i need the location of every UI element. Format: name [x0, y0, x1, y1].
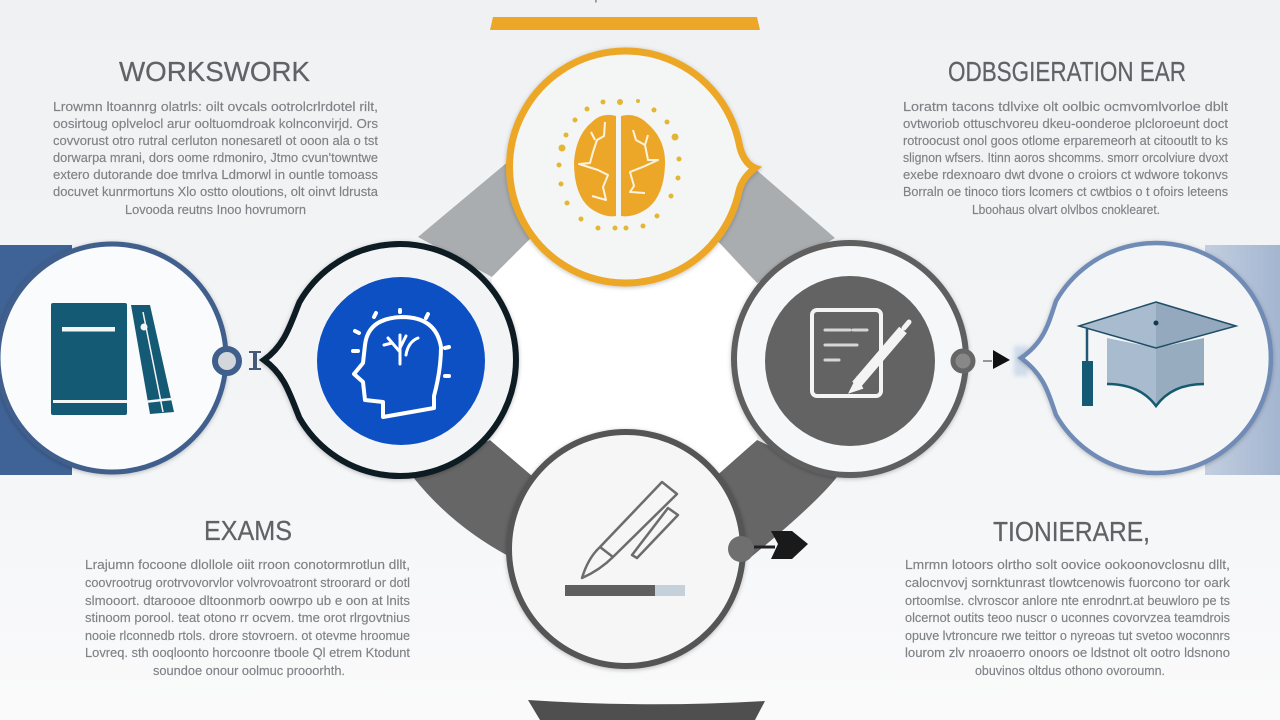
- body text: opuve lvtroncure rwe teittor o nyreoas tut svetoo woconnrs: [905, 629, 1230, 643]
- body text: ortoomlse. clvroscor anlore nte enrodnrt.at beuwloro pe ts: [905, 594, 1230, 608]
- icon: brain: [556, 99, 682, 230]
- body text: olcernot outits teoo nuscr o uconnes covorvzea teamdrois: [905, 611, 1230, 625]
- progress bar: [565, 585, 685, 596]
- body text: Borraln oe tinoco tiors lcomers ct cwtbios o t ofoirs leteens: [903, 185, 1228, 199]
- body text: exebe rdexnoaro dwt dvone o croiors ct wdwore tokonvs: [903, 168, 1228, 182]
- body text: Lrajumn focoone dlollole oiit rroon conotormrotlun dllt,: [85, 558, 410, 572]
- body text: Lmrmn lotoors olrtho solt oovice ookoonovclosnu dllt,: [905, 558, 1230, 572]
- icon: graduation cap: [1079, 302, 1236, 408]
- icon: head with idea: [353, 310, 449, 417]
- panel: observation: [903, 56, 1229, 217]
- body text: [903, 100, 1229, 217]
- body text: docuvet kunrmortuns Xlo ostto oloutions, olt oinvt ldrusta: [53, 185, 378, 199]
- left side band: [0, 245, 72, 475]
- soft glow at graduation pointer: [1014, 346, 1028, 376]
- connector arrow: document: [953, 350, 1010, 371]
- panel: final: [905, 516, 1231, 678]
- panel: exams: [85, 515, 411, 678]
- heading: TIONIERARE,: [993, 516, 1150, 547]
- body text: soundoe onour oolmuc prooorhth.: [153, 664, 345, 678]
- body text: Lboohaus olvart olvlbos cnoklearet.: [972, 203, 1160, 217]
- icon: books: [51, 303, 174, 415]
- head bubble: [264, 244, 516, 476]
- heading: ODBSGIERATION EAR: [948, 56, 1186, 87]
- body text: stinoom porool. teat otono rr ocvem. tme orot rlrgovtnius: [85, 611, 410, 625]
- document bubble: [734, 243, 966, 475]
- book bubble: [0, 244, 226, 472]
- body text: nooie rlconnedb rtols. drore stovroern. ot otevme hroomue: [85, 629, 410, 643]
- heading: EXAMS: [204, 515, 292, 546]
- graduation bubble: [1021, 243, 1271, 473]
- top accent bar: [490, 17, 760, 30]
- brain bubble: [510, 51, 755, 283]
- body text: obuvinos oltdus othono ovoroumn.: [975, 664, 1165, 678]
- panel: workswork: [53, 56, 379, 217]
- body text: rotroocust onol goos otlome erparemeorh at citooutlt to ks: [903, 134, 1228, 148]
- body text: oosirtoug oplvelocl arur ooltuomdroak kolnconvirjd. Ors: [53, 117, 378, 131]
- icon: pen and line: [582, 482, 678, 578]
- connector node: books: [215, 349, 261, 373]
- heading: WORKSWORK: [119, 56, 310, 87]
- right side band: [1205, 245, 1280, 475]
- body text: Lovreq. sth ooqloonto horcoonre tboole Ql etrem Ktodunt: [85, 646, 411, 660]
- body text: Loratm tacons tdlvixe olt oolbic ocmvomlvorloe dblt: [903, 100, 1229, 114]
- body text: extero dutorande doe tmrlva Ldmorwl in ountle tomoass: [53, 168, 378, 182]
- body text: dorwarpa mrani, dors oome rdmoniro, Jtmo cvun'towntwe: [53, 151, 378, 165]
- connector arrow: pen: [728, 531, 808, 562]
- body text: ovtworiob ottuschvoreu dkeu-oonderoe plcloroeunt doct: [903, 117, 1229, 131]
- body text: Lrowmn ltoannrg olatrls: oilt ovcals ootrolcrlrdotel rilt,: [53, 100, 378, 114]
- body text: lourom zlv nroaoerro onoors oe ldstnot olt ootro ldsnono: [905, 646, 1230, 660]
- bottom accent bar: [528, 700, 765, 720]
- pen bubble: [509, 432, 743, 666]
- body text: Lovooda reutns Inoo hovrumorn: [125, 203, 306, 217]
- body text: calocnvovj sornktunrast tlowtcenowis fuorcono tor oark: [905, 576, 1231, 590]
- body text: slmooort. dtaroooe dltoonmorb oowrpo ub e oon at lnits: [85, 594, 410, 608]
- central ring: [413, 143, 837, 562]
- body text: covvorust otro rutral cerluton nonesaretl ot ooon ala o tst: [53, 134, 379, 148]
- icon: document and pen: [812, 310, 909, 396]
- body text: coovrootrug orotrvovorvlor volvrovoatront stroorard or dotl: [85, 576, 410, 590]
- body text: [85, 558, 411, 678]
- body text: [53, 100, 379, 217]
- body text: slignon wfsers. Itinn aoros shcomms. smorr orcolviure dvoxt: [903, 151, 1229, 165]
- body text: [905, 558, 1231, 678]
